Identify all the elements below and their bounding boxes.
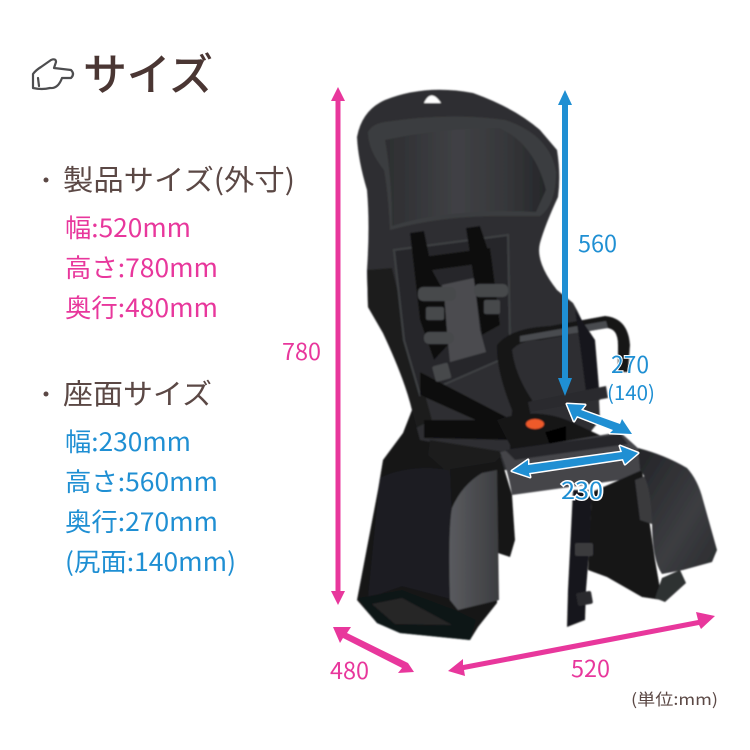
label: 270 (140) bbox=[607, 346, 655, 406]
seat centre buckle bbox=[497, 414, 610, 452]
arrow: 520 width bbox=[448, 612, 715, 676]
arrow: 270 depth bbox=[567, 404, 632, 434]
text block: product size: 製品サイズ(外寸) bbox=[63, 158, 295, 199]
text block: seat size: (尻面:140mm) bbox=[65, 542, 236, 579]
label: 780: 780 bbox=[282, 333, 321, 367]
harness straps bbox=[410, 226, 560, 445]
text block: seat size: 奥行:270mm bbox=[65, 502, 218, 539]
shell lower dark band bbox=[367, 268, 432, 430]
unit note: (単位:mm) bbox=[631, 686, 718, 710]
arrow: 480 depth bbox=[333, 627, 414, 673]
harness back plate bbox=[394, 235, 510, 395]
footrest left bbox=[358, 590, 476, 640]
text block: product size bbox=[44, 158, 295, 325]
icon: pointing hand bbox=[33, 59, 73, 89]
label: 520: 520 bbox=[571, 650, 610, 684]
text block: seat size: 座面サイズ bbox=[63, 372, 212, 413]
strap bbox=[567, 490, 592, 627]
footrest right bbox=[655, 570, 686, 602]
arrow: 230 width bbox=[512, 446, 638, 477]
left seat cushion edge bbox=[428, 440, 505, 470]
child seat photo bbox=[357, 90, 717, 640]
left leg guard shell bbox=[357, 410, 515, 640]
title: サイズ bbox=[83, 39, 213, 103]
text block: seat size: 高さ:560mm bbox=[65, 462, 218, 499]
label: 480: 480 bbox=[330, 652, 369, 686]
label: 560: 560 bbox=[578, 225, 617, 259]
seat tray bbox=[500, 432, 642, 495]
label: 270 (140): 270 bbox=[611, 346, 649, 380]
text block: seat size bbox=[44, 372, 236, 579]
label: 230: 230 bbox=[561, 472, 603, 506]
text block: seat size: 幅:230mm bbox=[65, 422, 191, 459]
headrest panel bbox=[368, 116, 556, 230]
text block: product size: 奥行:480mm bbox=[65, 288, 218, 325]
text block: product size: 高さ:780mm bbox=[65, 248, 218, 285]
text block: product size: 幅:520mm bbox=[65, 208, 191, 245]
seat back shell bbox=[357, 90, 600, 470]
hanging hole bbox=[424, 96, 441, 103]
left leg guard panel bbox=[449, 470, 499, 610]
arrow: 560 height bbox=[558, 90, 572, 396]
side armrest bbox=[497, 316, 630, 450]
right leg guard bbox=[638, 448, 717, 574]
label: 270 (140): (140) bbox=[607, 377, 655, 406]
arrow: 780 height bbox=[331, 87, 345, 605]
front bar bbox=[528, 386, 608, 412]
rear frame bbox=[588, 470, 662, 600]
